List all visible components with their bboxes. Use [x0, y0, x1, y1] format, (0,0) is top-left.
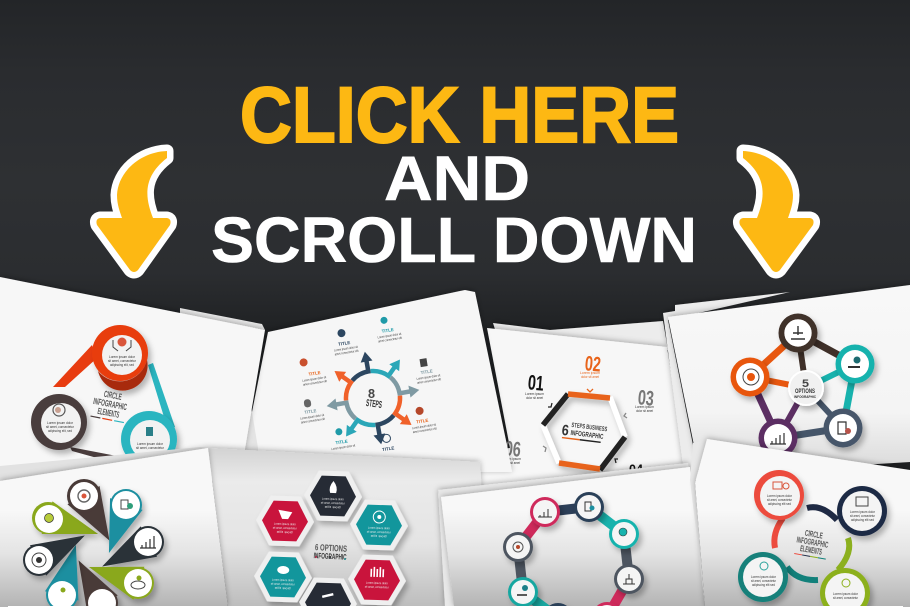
step labels: TITLE	[335, 439, 348, 445]
circle: teal: sit amet, consectetur	[751, 579, 777, 583]
ring node: teal right	[609, 519, 639, 549]
heading: click here: CLICK HERE	[240, 70, 679, 159]
step labels: TITLE	[420, 368, 433, 375]
step numbers: Lorem ipsum	[525, 392, 544, 396]
hexagon: teal right: Lorem ipsum dolor	[368, 526, 390, 530]
circle: lime: sit amet, consectetur	[833, 596, 859, 600]
title: ELEMENTS	[97, 406, 120, 420]
arcs	[774, 507, 849, 580]
circle: lime: Lorem ipsum dolor	[833, 592, 859, 596]
hexagon ring	[543, 394, 625, 470]
panel: 5 options sheet	[663, 285, 910, 480]
petal: teal lower	[46, 548, 78, 607]
title	[90, 387, 130, 423]
ring node: pink	[530, 497, 560, 527]
circle: coral: adipiscing elit sed	[768, 502, 791, 506]
step labels: TITLE	[338, 340, 351, 347]
node: center label	[789, 371, 823, 405]
center label: INFOGRAPHIC	[570, 430, 604, 441]
step numbers: dolor sit amet	[581, 375, 599, 379]
circle: teal: sit amet, consectetur	[136, 446, 165, 450]
center label	[313, 542, 347, 562]
hexagon: red right: sit amet, consectetur	[365, 585, 389, 589]
circle: navy: sit amet, consectetur	[850, 514, 876, 518]
circle: brown	[31, 394, 87, 450]
hexagon: teal right: elit sed	[371, 534, 387, 538]
center label	[365, 386, 383, 411]
hexagon: red right	[347, 554, 407, 606]
title: CIRCLE	[804, 528, 824, 541]
ring node: teal left	[508, 577, 538, 607]
panel: 8 steps sheet	[235, 290, 512, 472]
circle: brown: Lorem ipsum dolor	[47, 421, 74, 425]
step labels: TITLE	[308, 370, 321, 377]
title: INFOGRAPHIC	[796, 534, 829, 550]
node: brown	[778, 314, 818, 352]
circle: navy: Lorem ipsum dolor	[850, 510, 876, 514]
step numbers: 01	[527, 371, 545, 396]
step labels: Lorem ipsum dolor sit	[300, 413, 324, 421]
circle: red: sit amet, consectetur	[108, 359, 137, 363]
heading: and: AND	[384, 144, 530, 214]
step labels: TITLE	[304, 408, 317, 415]
step numbers: Lorem ipsum	[502, 457, 521, 461]
node: navy	[824, 408, 862, 448]
circle: navy	[837, 486, 887, 536]
panel: 6 options hexagon sheet	[208, 448, 482, 607]
circle: red	[92, 325, 148, 391]
panel: circle infographic sheet top left	[0, 277, 265, 480]
bottom white edge	[8, 606, 903, 607]
hexagon: red left: Lorem ipsum dolor	[274, 522, 296, 526]
node: center label: INFOGRAPHIC	[794, 394, 816, 399]
circle: teal: Lorem ipsum dolor	[751, 575, 777, 579]
center label	[561, 421, 608, 444]
hexagon: dark top: elit sed	[325, 505, 341, 509]
circle: coral	[754, 470, 804, 520]
petal: dark left	[23, 537, 82, 576]
ring node: gray left	[503, 532, 533, 562]
step labels: Lorem ipsum dolor sit	[416, 373, 441, 381]
petal: lime upper	[32, 502, 95, 534]
hexagon: red left: sit amet, consectetur	[273, 526, 297, 530]
node: orange	[730, 358, 770, 396]
step numbers: 03	[637, 386, 655, 411]
circle: red: adipiscing elit, sed	[110, 363, 134, 367]
panel: ring of circles sheet	[438, 463, 705, 607]
node: teal	[836, 344, 874, 384]
step labels: amet consectetur elit	[334, 349, 359, 356]
hexagon: dark top: Lorem ipsum dolor	[322, 497, 344, 501]
center label: 6	[561, 422, 570, 440]
ring connectors	[518, 507, 629, 607]
step numbers: 02	[584, 352, 602, 377]
circle: teal: Lorem ipsum dolor	[137, 442, 164, 446]
hexagon: dark top	[303, 470, 363, 522]
petal: dark right	[105, 526, 164, 565]
center label: 8	[368, 386, 375, 401]
step labels: Lorem ipsum dolor sit	[412, 422, 436, 430]
panel: circle infographic sheet bottom right	[690, 439, 910, 607]
hexagon: teal left: elit sed	[275, 586, 291, 590]
step labels: TITLE	[381, 327, 394, 334]
chevron markers	[543, 389, 627, 463]
center label: INFOGRAPHIC	[313, 551, 347, 562]
network connectors	[750, 333, 855, 438]
circle: brown: adipiscing elit, sed	[48, 429, 72, 433]
circle: navy: adipiscing elit sed	[851, 518, 874, 522]
ring node: navy bottom	[543, 603, 573, 607]
step numbers: 06	[504, 437, 522, 462]
step labels: amet consectetur elit	[303, 379, 327, 387]
hexagon: dark bottom	[298, 577, 358, 607]
center label: 6 OPTIONS	[315, 542, 347, 554]
step numbers: dolor sit amet	[526, 396, 543, 400]
step labels: amet consectetur elit	[301, 417, 325, 425]
title	[794, 526, 831, 560]
step labels: amet consectetur elit	[378, 336, 402, 343]
panel: 6 steps hexagon sheet	[450, 321, 690, 500]
step labels: amet consectetur elit	[417, 377, 441, 385]
step labels: Lorem ipsum dolor sit	[302, 375, 327, 383]
step numbers: Lorem ipsum	[580, 371, 600, 375]
step labels: TITLE	[416, 418, 429, 424]
ring node: pink bottom	[592, 602, 622, 607]
step labels: Lorem ipsum dolor sit	[377, 332, 402, 340]
step numbers: dolor sit amet	[503, 461, 520, 465]
step numbers: dolor sit amet	[636, 409, 653, 413]
step numbers	[502, 352, 655, 477]
arrow: right curved down arrow	[739, 151, 814, 272]
hexagon: teal left	[253, 551, 313, 603]
hexagon: red left: elit sed	[277, 530, 293, 534]
step labels: amet consectetur elit	[413, 426, 437, 434]
circle: coral: sit amet, consectetur	[767, 498, 793, 502]
node: purple	[758, 418, 798, 458]
hexagon: teal right: sit amet, consectetur	[367, 530, 391, 534]
petal: brown upper	[67, 479, 108, 538]
ring node: navy	[574, 492, 604, 522]
circle: coral: Lorem ipsum dolor	[767, 494, 793, 498]
title: ELEMENTS	[799, 543, 823, 557]
panel: six petals sheet	[0, 447, 228, 607]
circle: lime	[820, 568, 870, 607]
center label: STEPS	[365, 398, 383, 411]
step labels	[287, 310, 451, 464]
node: center label: 5	[802, 378, 809, 390]
petal: teal upper	[110, 489, 142, 550]
petal: brown lower	[80, 563, 118, 607]
title: INFOGRAPHIC	[93, 396, 128, 412]
ring of eight arrows	[325, 350, 421, 446]
step numbers: Lorem ipsum	[635, 405, 654, 409]
hexagon: dark top: sit amet, consectetur	[321, 501, 345, 505]
circle: red: Lorem ipsum dolor	[109, 355, 136, 359]
step labels: Lorem ipsum dolor sit	[334, 345, 358, 352]
node: center label: OPTIONS	[795, 389, 815, 395]
circle: teal	[738, 552, 788, 602]
arrow: left curved down arrow	[96, 151, 171, 272]
title: CIRCLE	[103, 389, 123, 402]
ring node: gray right	[614, 564, 644, 594]
hexagon: teal left: Lorem ipsum dolor	[272, 578, 294, 582]
hexagon: red right: Lorem ipsum dolor	[366, 581, 388, 585]
circle: teal	[121, 411, 177, 467]
step numbers: 04	[629, 461, 643, 477]
step labels: Lorem ipsum dolor sit	[331, 443, 356, 451]
ribbon strips	[53, 345, 175, 461]
petal: lime lower	[92, 567, 154, 599]
hexagon: teal left: sit amet, consectetur	[271, 582, 295, 586]
center label: STEPS BUSINESS	[571, 422, 608, 433]
circle: teal: adipiscing elit sed	[752, 583, 775, 587]
hexagon: teal right	[349, 499, 409, 551]
hexagon: red left	[255, 495, 315, 547]
heading: scroll down: SCROLL DOWN	[211, 204, 697, 276]
step labels: TITLE	[382, 445, 395, 452]
circle: brown: sit amet, consectetur	[46, 425, 75, 429]
